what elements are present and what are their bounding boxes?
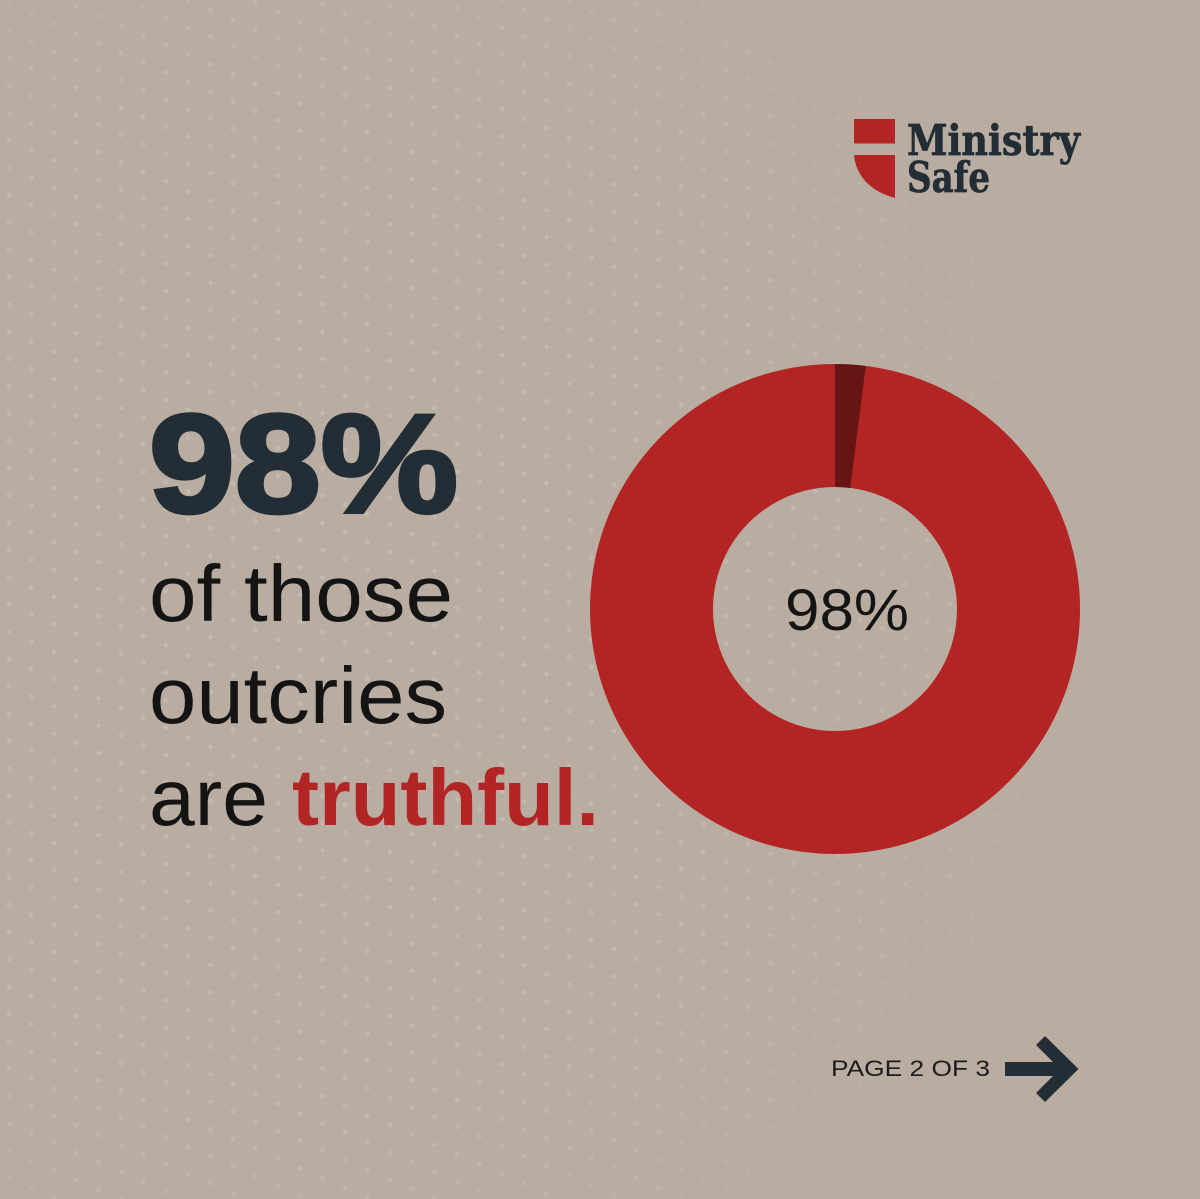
statement text: of those xyxy=(149,549,453,638)
headline statistic: 98% xyxy=(149,385,458,542)
donut: 98% segment xyxy=(590,364,1080,854)
donut chart xyxy=(590,364,1080,854)
donut: 2% segment xyxy=(835,364,866,488)
statement text xyxy=(149,549,599,842)
donut center label: 98% xyxy=(785,578,909,643)
icon: shield xyxy=(854,119,895,198)
logo wordmark: Ministry xyxy=(907,116,1081,165)
statement text: truthful. xyxy=(292,753,599,842)
logo: MinistrySafe xyxy=(854,116,1081,202)
page indicator: PAGE 2 OF 3 xyxy=(831,1056,990,1081)
logo wordmark xyxy=(907,116,1081,202)
logo wordmark: Safe xyxy=(907,153,990,202)
statement text: are xyxy=(149,753,268,842)
statement text: outcries xyxy=(149,651,447,740)
arrow xyxy=(1005,1036,1078,1102)
